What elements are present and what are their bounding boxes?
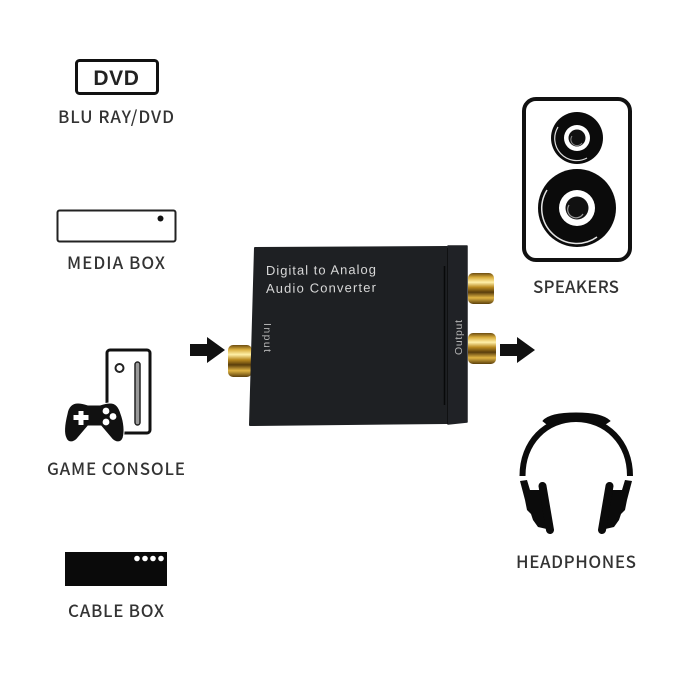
label: Speakers: SPEAKERS [533, 273, 619, 298]
icon: DVD player [76, 60, 158, 94]
device title: Digital to Analog [266, 262, 376, 278]
arrow: output [500, 337, 535, 363]
icon: speakers [524, 99, 630, 260]
icon: DVD player: DVD [93, 67, 140, 90]
input RCA connector [228, 345, 252, 377]
label: Cable box: CABLE BOX [68, 597, 164, 622]
output RCA connector top [468, 273, 494, 304]
device side flap [448, 246, 467, 424]
arrow: input [190, 337, 225, 363]
label: Game console: GAME CONSOLE [47, 455, 185, 480]
icon: cable box [65, 552, 167, 586]
device subtitle: Audio Converter [266, 280, 377, 296]
input label: Input [261, 323, 273, 352]
output RCA connector bottom [468, 333, 496, 364]
output label: Output [453, 320, 465, 355]
label: Media box: MEDIA BOX [67, 249, 165, 274]
illustration: audio converter device [228, 246, 496, 425]
icon: headphones [520, 413, 632, 530]
device body [250, 247, 447, 425]
label: Headphones: HEADPHONES [516, 548, 636, 573]
icon: media box [58, 210, 176, 242]
label: Blu Ray/DVD: BLU RAY/DVD [58, 103, 174, 128]
icon: game console [64, 350, 150, 442]
